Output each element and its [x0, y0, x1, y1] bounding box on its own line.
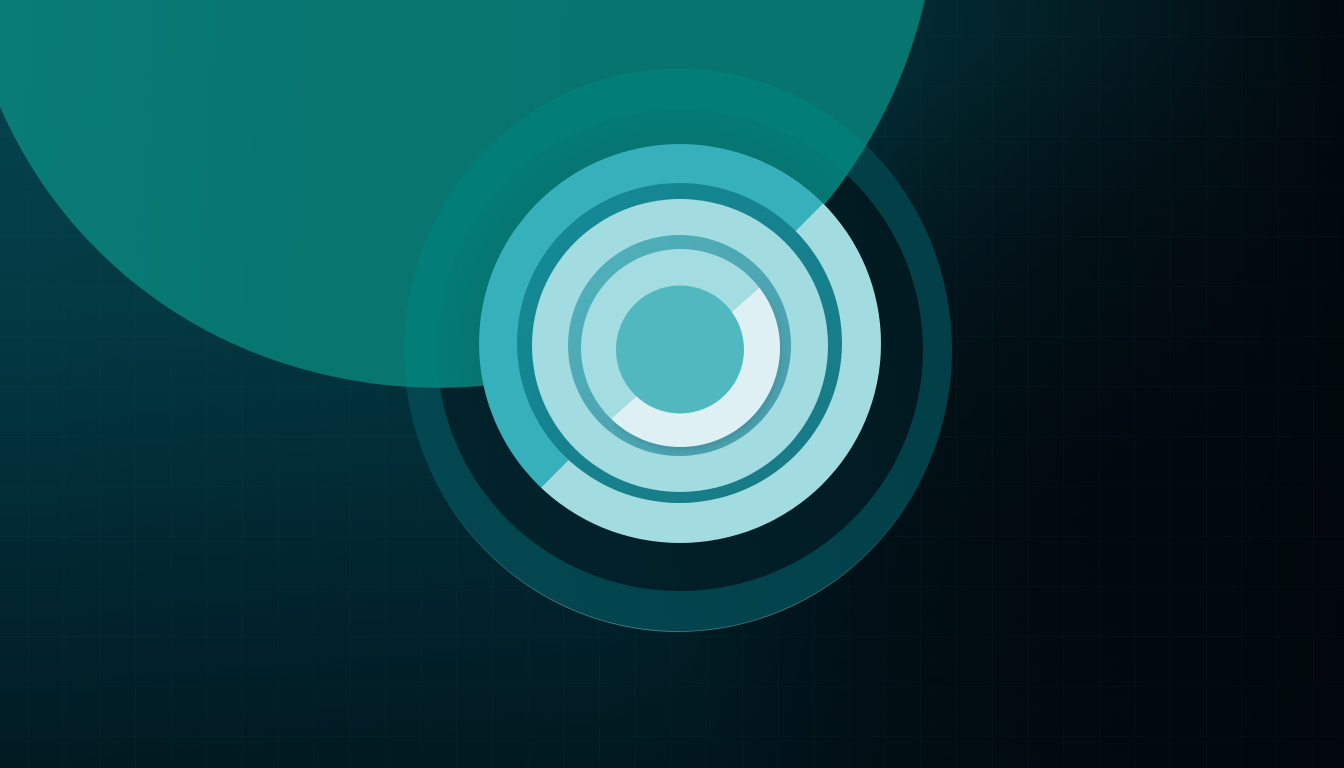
centre disc	[616, 286, 744, 414]
outer translucent ring	[404, 68, 952, 632]
white wedge arc	[612, 288, 781, 450]
main disc: teal upper-left and pale lower-right	[479, 144, 881, 543]
dark teal ring	[517, 183, 842, 503]
middle ring	[568, 235, 791, 456]
large teal circle	[0, 0, 925, 388]
